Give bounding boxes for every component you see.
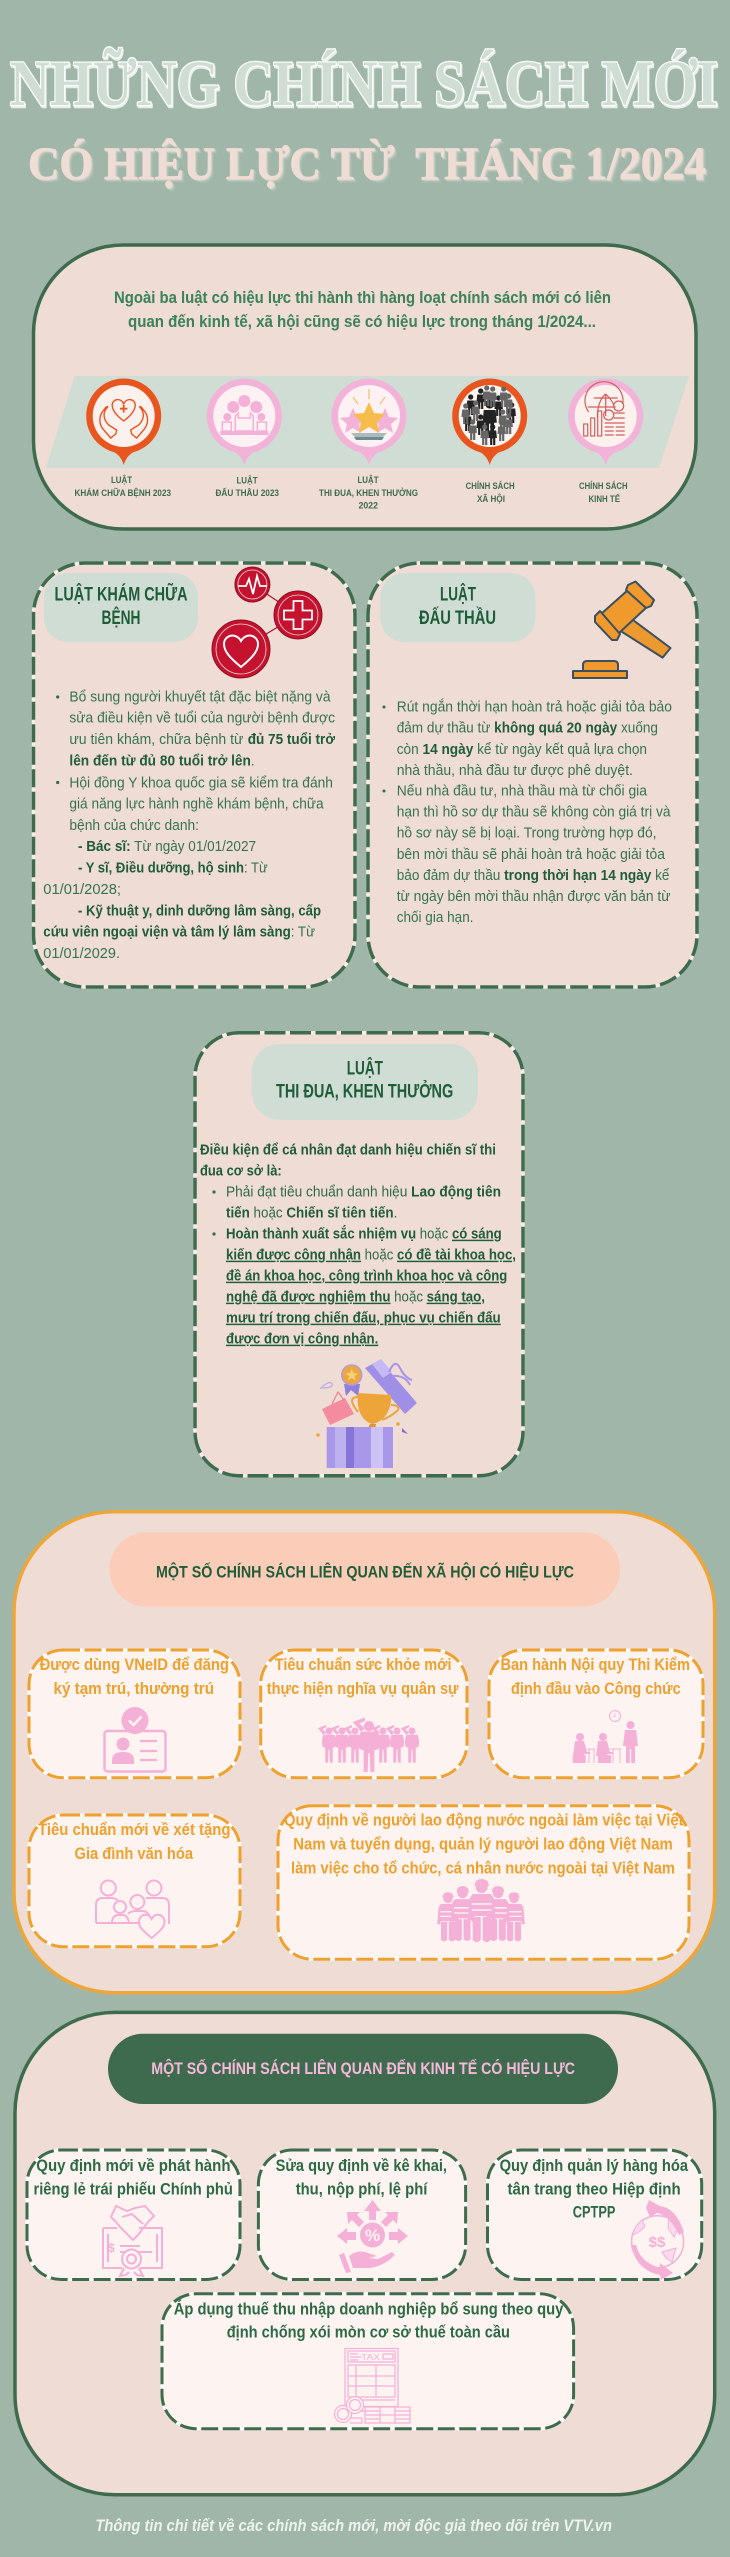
icon: exam room	[573, 1710, 638, 1763]
text: emulation conditions: Hoàn thành xuất sắc nhiệm vụ hoặc có sáng	[226, 1225, 502, 1243]
card: CPTPP: CPTPP	[573, 2203, 616, 2222]
text: emulation conditions	[200, 1142, 516, 1348]
text: health law content: giá năng lực hành nghề khám bệnh, chữa	[69, 796, 324, 812]
text: health law content: 01/01/2029.	[43, 946, 120, 962]
pin labels: KINH TẾ	[588, 494, 620, 505]
text: emulation conditions: được đơn vị công nhận.	[226, 1332, 378, 1348]
text: emulation conditions: Phải đạt tiêu chuẩn danh hiệu Lao động tiên	[226, 1185, 501, 1201]
heading: LUẬT KHÁM CHỮA	[54, 584, 188, 606]
text: health law content: sửa điều kiện về tuổi của người bệnh được	[69, 711, 335, 727]
panel: Luật Khám chữa bệnh	[34, 563, 355, 987]
ribbon	[46, 376, 689, 468]
text: emulation conditions: kiến được công nhận hoặc có đề tài khoa học,	[226, 1248, 516, 1264]
pin: health law	[86, 378, 161, 465]
card: fees: thu, nộp phí, lệ phí	[296, 2180, 429, 2199]
text: bidding law content: chối gia hạn.	[397, 910, 474, 926]
pin: bidding law	[207, 378, 282, 465]
text: emulation conditions: đề án khoa học, công trình khoa học và công	[226, 1269, 507, 1285]
text: bidding law content: Nếu nhà đầu tư, nhà thầu mà từ chối gia	[397, 784, 648, 800]
heading	[44, 573, 198, 642]
card: global minimum tax: định chống xói mòn cơ sở thuế toàn cầu	[227, 2322, 510, 2341]
card: cultural family: Tiêu chuẩn mới về xét tặng	[38, 1820, 230, 1839]
heading	[108, 2034, 618, 2104]
text: health law content: đủ 75 tuổi trở	[248, 732, 336, 748]
card: fees: Sửa quy định về kê khai,	[276, 2156, 447, 2175]
card: global minimum tax	[162, 2294, 574, 2429]
text: health law content: - Bác sĩ: Từ ngày 01/01/2027	[78, 839, 256, 855]
card: VNeID: Được dùng VNeID để đăng	[40, 1655, 229, 1674]
text: bidding law content: từ ngày bên mời thầu nhận được văn bản từ	[397, 889, 671, 905]
card: civil servant exam: Ban hành Nội quy Thi Kiểm	[500, 1655, 690, 1674]
card: foreign workers: làm việc cho tổ chức, cá nhân nước ngoài tại Việt Nam	[291, 1858, 675, 1877]
card: military health: thực hiện nghĩa vụ quân sự	[267, 1679, 459, 1698]
card: CPTPP	[488, 2150, 702, 2280]
card: global minimum tax: Áp dụng thuế thu nhập doanh nghiệp bổ sung theo quy	[174, 2299, 564, 2318]
pin labels: XÃ HỘI	[477, 493, 505, 505]
pin: social policies	[452, 378, 527, 465]
pin labels: LUẬT	[111, 474, 132, 486]
icon: globe with arrows: $$	[649, 2234, 666, 2251]
pin labels: THI ĐUA, KHEN THƯỞNG	[319, 487, 418, 499]
text: health law content	[43, 690, 336, 962]
text: health law content: Bổ sung người khuyết tật đặc biệt nặng và	[69, 690, 331, 706]
card: civil servant exam: định đầu vào Công chức	[511, 1679, 681, 1698]
icon: percent and hand: %	[365, 2226, 380, 2245]
heading: MỘT SỐ CHÍNH SÁCH LIÊN QUAN ĐẾN XÃ HỘI CÓ HIỆU LỰC	[156, 1561, 574, 1581]
heading: MỘT SỐ CHÍNH SÁCH LIÊN QUAN ĐẾN KINH TẾ CÓ HIỆU LỰC	[151, 2058, 575, 2078]
text: emulation conditions: Điều kiện để cá nhân đạt danh hiệu chiến sĩ thi	[200, 1142, 496, 1158]
icon: globe with arrows	[631, 2200, 684, 2280]
pin labels: KHÁM CHỮA BỆNH 2023	[74, 487, 171, 499]
card: foreign workers	[278, 1806, 689, 1959]
card: VNeID	[29, 1650, 240, 1778]
card: foreign workers: Quy định về người lao động nước ngoài làm việc tại Việt	[284, 1811, 684, 1830]
heading	[109, 1532, 620, 1607]
text: health law content: cứu viên ngoại viện và tâm lý lâm sàng: Từ	[43, 925, 315, 941]
icon: workers	[437, 1879, 525, 1942]
text: bidding law content: bảo đảm dự thầu trong thời hạn 14 ngày kể	[397, 868, 670, 884]
icon: tax form	[334, 2348, 410, 2423]
card: CPTPP: Quy định quản lý hàng hóa	[500, 2156, 688, 2175]
icon: tax form: TAX	[361, 2353, 381, 2362]
text: health law content: lên đến từ đủ 80 tuổi trở lên.	[69, 754, 255, 770]
heading	[252, 1044, 478, 1120]
heading: LUẬT	[347, 1057, 383, 1079]
card: CPTPP: tân trang theo Hiệp định	[508, 2180, 681, 2199]
icon: gavel	[573, 582, 670, 678]
icon: family	[96, 1880, 169, 1938]
text: bidding law content: hạn thì hồ sơ dự thầu sẽ không còn giá trị và	[397, 805, 671, 821]
card: government bonds: $	[108, 2241, 115, 2255]
icon: trophy and gift box	[316, 1359, 417, 1468]
heading: LUẬT	[440, 584, 476, 606]
pin labels: ĐẤU THẦU 2023	[216, 488, 279, 499]
text: emulation conditions: đua cơ sở là:	[200, 1163, 282, 1179]
card: military health	[261, 1650, 467, 1778]
pin labels: CHÍNH SÁCH	[579, 481, 628, 492]
card: fees	[258, 2150, 466, 2280]
panel: introduction	[34, 245, 696, 529]
pin: emulation law	[332, 378, 406, 465]
heading: THI ĐUA, KHEN THƯỞNG	[276, 1081, 453, 1103]
text: bidding law content: Rút ngắn thời hạn hoàn trả hoặc giải tỏa bảo	[397, 699, 672, 716]
text: bidding law content: hồ sơ này sẽ bị loại. Trong trường hợp đó,	[397, 826, 656, 842]
text: health law content: bệnh của chức danh:	[69, 818, 199, 834]
text: health law content: - Kỹ thuật y, dinh dưỡng lâm sàng, cấp	[78, 904, 321, 920]
icon: medical	[212, 567, 322, 678]
intro text: quan đến kinh tế, xã hội cũng sẽ có hiệu lực trong tháng 1/2024...	[128, 313, 596, 331]
heading: BỆNH	[102, 607, 140, 629]
text: emulation conditions: tiến hoặc Chiến sĩ tiên tiến.	[226, 1206, 397, 1222]
pin labels: LUẬT	[358, 474, 379, 486]
heading: ĐẤU THẦU	[419, 607, 496, 629]
text: health law content: 01/01/2028;	[43, 882, 121, 898]
pin labels: LUẬT	[236, 474, 258, 486]
panel: Luật Thi đua, khen thưởng	[195, 1033, 523, 1476]
text: emulation conditions: nghệ đã được nghiệm thu hoặc sáng tạo,	[226, 1290, 485, 1306]
card: civil servant exam	[489, 1650, 703, 1778]
card: VNeID: ký tạm trú, thường trú	[54, 1679, 214, 1698]
text: health law content: Hội đồng Y khoa quốc gia sẽ kiểm tra đánh	[69, 775, 333, 791]
icon: bond certificate	[103, 2206, 162, 2276]
panel: Luật Đấu thầu	[368, 563, 697, 987]
heading	[380, 573, 535, 642]
card: military health: Tiêu chuẩn sức khỏe mới	[275, 1655, 452, 1674]
footer note: Thông tin chi tiết về các chính sách mới, mời độc giả theo dõi trên VTV.vn	[95, 2516, 612, 2535]
pin: economic policies	[568, 378, 643, 465]
card: foreign workers: Nam và tuyển dụng, quản lý người lao động Việt Nam	[293, 1835, 673, 1854]
panel: economic policies	[15, 2012, 715, 2495]
intro text	[114, 289, 611, 331]
pin labels: 2022	[358, 500, 378, 512]
intro text: Ngoài ba luật có hiệu lực thi hành thì hàng loạt chính sách mới có liên	[114, 289, 611, 307]
card: cultural family: Gia đình văn hóa	[74, 1844, 193, 1863]
text: bidding law content: bên mời thầu sẽ phải hoàn trả hoặc giải tỏa	[397, 847, 666, 863]
panel: social policies	[14, 1512, 715, 1993]
pin labels: CHÍNH SÁCH	[466, 481, 515, 492]
card: cultural family	[29, 1815, 240, 1947]
icon: ID card	[104, 1707, 166, 1772]
card: government bonds: Quy định mới về phát hành	[36, 2156, 230, 2175]
icon: soldiers	[318, 1717, 419, 1772]
text: emulation conditions: mưu trí trong chiến đấu, phục vụ chiến đấu	[226, 1311, 501, 1327]
text: health law content: - Y sĩ, Điều dưỡng, hộ sinh: Từ	[78, 861, 268, 877]
card: government bonds: riêng lẻ trái phiếu Chính phủ	[34, 2180, 233, 2199]
pin labels	[74, 474, 628, 512]
text: bidding law content: còn 14 ngày kể từ ngày kết quả lựa chọn	[397, 742, 647, 758]
text: bidding law content: nhà thầu, nhà đầu tư được phê duyệt.	[397, 763, 633, 779]
text: bidding law content	[382, 699, 672, 926]
text: bidding law content: đảm dự thầu từ không quá 20 ngày xuống	[397, 721, 658, 737]
icon: percent and hand	[337, 2200, 408, 2273]
text: health law content: ưu tiên khám, chữa bệnh từ	[69, 732, 244, 748]
card: government bonds	[27, 2150, 240, 2280]
